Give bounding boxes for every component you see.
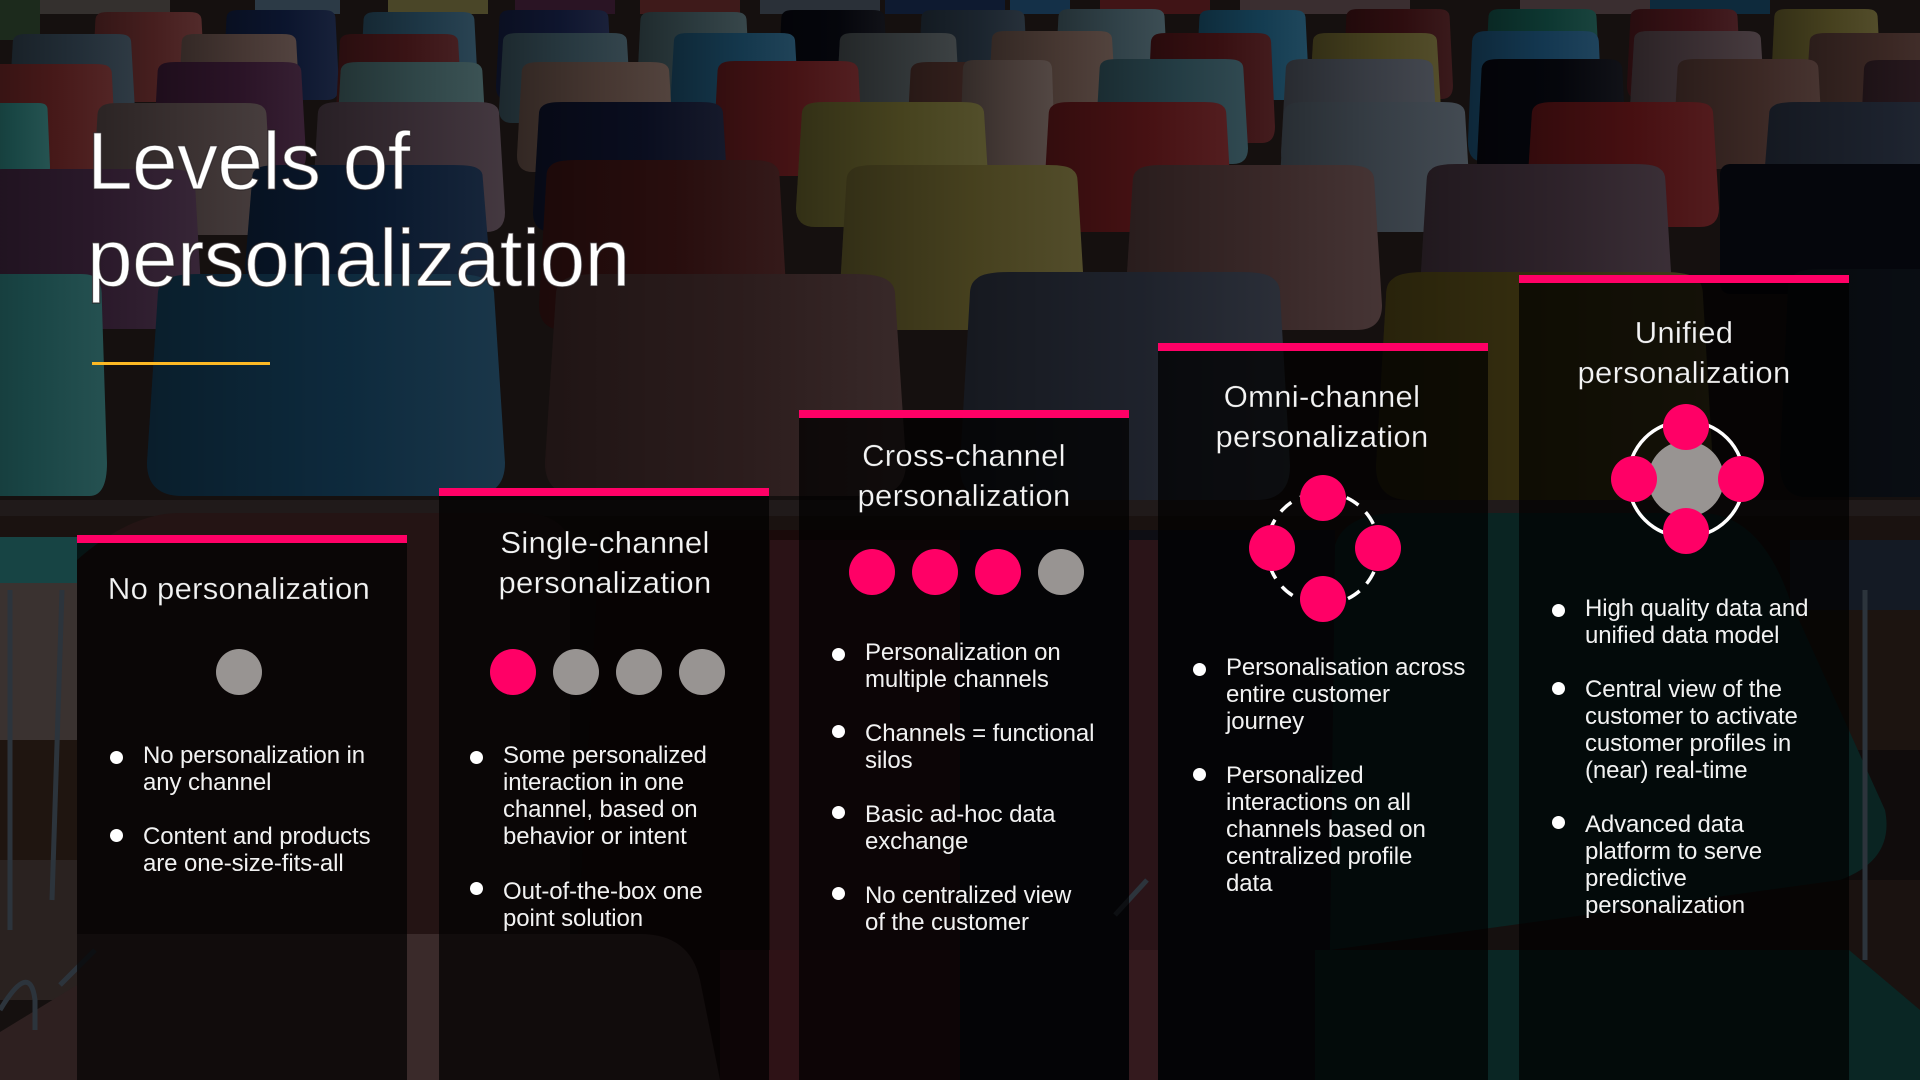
bullet: no personalization in any channel bbox=[110, 742, 365, 796]
title: Levels of bbox=[87, 116, 410, 207]
bullet: central customer view bbox=[1552, 676, 1798, 784]
row D bbox=[0, 103, 50, 178]
panel: cross-channel personalization bbox=[799, 410, 1129, 1080]
bullet: interactions on all channels: channels based on bbox=[1226, 816, 1426, 843]
bullet: basic data exchange: Basic ad-hoc data bbox=[865, 801, 1055, 828]
icon: three pink and one grey dots bbox=[849, 549, 1084, 595]
panel accent bar bbox=[439, 488, 769, 496]
bullet: interactions on all channels: data bbox=[1226, 870, 1272, 897]
heading: cross-channel personalization: personalization bbox=[857, 478, 1071, 513]
heading: omni-channel personalization bbox=[1215, 379, 1429, 454]
bullet: one point solution bbox=[470, 878, 703, 932]
title underline bbox=[92, 362, 270, 365]
bullet: advanced data platform bbox=[1552, 811, 1762, 919]
panel: omni-channel personalization bbox=[1158, 343, 1488, 1080]
heading: cross-channel personalization: Cross-channel bbox=[862, 438, 1066, 473]
heading: single-channel personalization: personalization bbox=[498, 565, 712, 600]
bullet: some personalized interaction: channel, based on bbox=[503, 796, 697, 823]
bullet: interactions on all channels: Personalized bbox=[1226, 762, 1364, 789]
bullet: across customer journey: Personalisation across bbox=[1226, 654, 1465, 681]
panel accent bar bbox=[77, 535, 407, 543]
bullet: unified data model: High quality data and bbox=[1585, 595, 1808, 622]
heading: single-channel personalization bbox=[498, 525, 712, 600]
bullet: basic data exchange bbox=[832, 801, 1056, 855]
bullet: one point solution: Out-of-the-box one bbox=[503, 878, 703, 905]
bullet: no centralized view: of the customer bbox=[865, 909, 1029, 936]
bullet: advanced data platform: platform to serve bbox=[1585, 838, 1762, 865]
icon: grey hub with four pink dots on solid ring bbox=[1611, 404, 1764, 554]
bullet: across customer journey bbox=[1193, 654, 1465, 735]
heading: single-channel personalization: Single-channel bbox=[500, 525, 710, 560]
bullet: multiple channels: multiple channels bbox=[865, 666, 1049, 693]
heading: unified personalization: personalization bbox=[1577, 355, 1791, 390]
floor and lower row bbox=[0, 500, 1920, 516]
panel accent bar bbox=[1158, 343, 1488, 351]
panel: single-channel personalization bbox=[439, 488, 769, 1080]
heading: omni-channel personalization: Omni-channel bbox=[1224, 379, 1420, 414]
bullet: interactions on all channels: centralized profile bbox=[1226, 843, 1412, 870]
icon: one grey channel dot bbox=[216, 649, 262, 695]
bullet: central customer view: customer to activate bbox=[1585, 703, 1798, 730]
bullet: some personalized interaction: interaction in one bbox=[503, 769, 684, 796]
bullet: functional silos: silos bbox=[865, 747, 913, 774]
bullet: functional silos bbox=[832, 720, 1094, 774]
bullet: no centralized view bbox=[832, 882, 1072, 936]
bullet: multiple channels bbox=[832, 639, 1061, 693]
bullet: one point solution: point solution bbox=[503, 905, 643, 932]
bullet: advanced data platform: personalization bbox=[1585, 892, 1745, 919]
title bbox=[87, 116, 630, 304]
heading: cross-channel personalization bbox=[857, 438, 1071, 513]
bullet: basic data exchange: exchange bbox=[865, 828, 968, 855]
panel: unified personalization bbox=[1519, 275, 1849, 1080]
panel accent bar bbox=[1519, 275, 1849, 283]
bullet: advanced data platform: predictive bbox=[1585, 865, 1687, 892]
chair legs bbox=[0, 590, 1865, 1030]
bullet: multiple channels: Personalization on bbox=[865, 639, 1061, 666]
bullet: across customer journey: entire customer bbox=[1226, 681, 1390, 708]
icon: one pink and three grey dots bbox=[490, 649, 725, 695]
title: personalization bbox=[87, 213, 630, 304]
row A bbox=[92, 12, 205, 102]
bullet: one-size-fits-all: are one-size-fits-all bbox=[143, 850, 344, 877]
heading: unified personalization bbox=[1577, 315, 1791, 390]
bullet: central customer view: customer profiles in bbox=[1585, 730, 1791, 757]
panel: no personalization bbox=[77, 535, 407, 1080]
bullet: unified data model bbox=[1552, 595, 1808, 649]
bullet: unified data model: unified data model bbox=[1585, 622, 1779, 649]
icon: four pink dots on dashed ring bbox=[1249, 475, 1401, 622]
row F bbox=[0, 274, 107, 496]
bullet: one-size-fits-all bbox=[110, 823, 370, 877]
bullet: central customer view: Central view of the bbox=[1585, 676, 1782, 703]
bullet: functional silos: Channels = functional bbox=[865, 720, 1094, 747]
heading: omni-channel personalization: personalization bbox=[1215, 419, 1429, 454]
bullet: some personalized interaction: Some personalized bbox=[503, 742, 707, 769]
bullet: interactions on all channels: interactions on all bbox=[1226, 789, 1411, 816]
row B bbox=[9, 34, 135, 124]
bullet: no personalization in any channel: any channel bbox=[143, 769, 271, 796]
bullet: no personalization in any channel: No personalization in bbox=[143, 742, 365, 769]
bullet: some personalized interaction bbox=[470, 742, 707, 850]
bullet: across customer journey: journey bbox=[1226, 708, 1304, 735]
bullet: one-size-fits-all: Content and products bbox=[143, 823, 370, 850]
heading: no personalization: No personalization bbox=[108, 571, 370, 606]
bullet: central customer view: (near) real-time bbox=[1585, 757, 1747, 784]
bullet: some personalized interaction: behavior or intent bbox=[503, 823, 687, 850]
bullet: advanced data platform: Advanced data bbox=[1585, 811, 1744, 838]
heading: unified personalization: Unified bbox=[1635, 315, 1733, 350]
row C bbox=[0, 64, 116, 174]
panel accent bar bbox=[799, 410, 1129, 418]
bullet: interactions on all channels bbox=[1193, 762, 1426, 897]
bullet: no centralized view: No centralized view bbox=[865, 882, 1071, 909]
row E bbox=[0, 169, 202, 329]
